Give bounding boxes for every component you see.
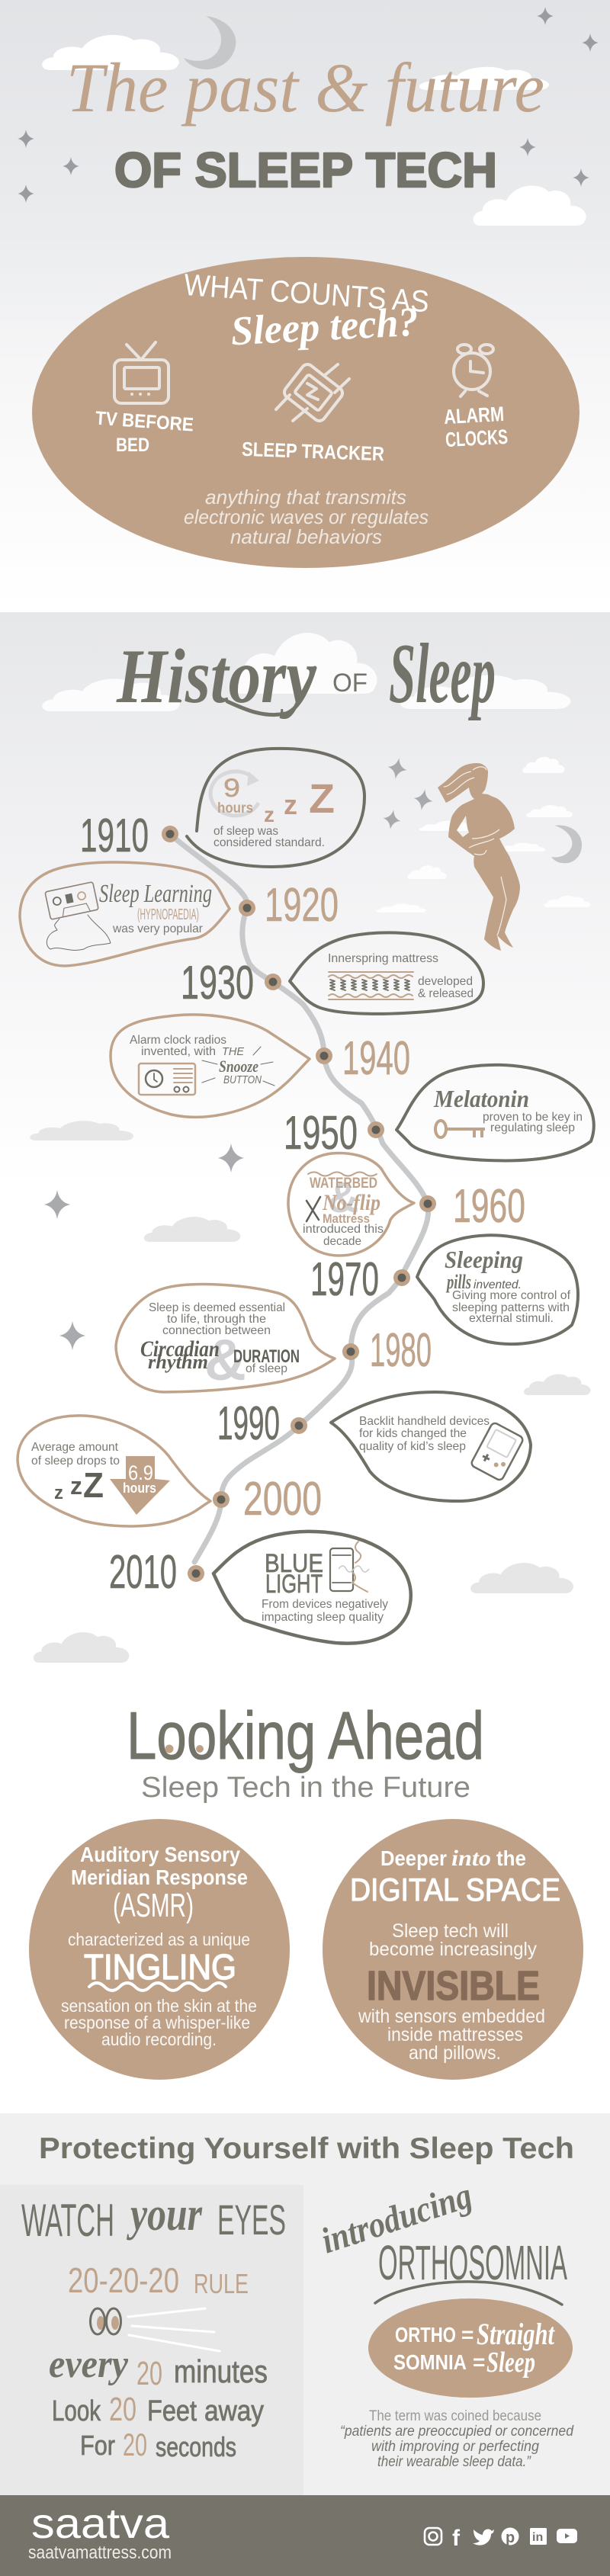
callout 1910: considered standard. [214,836,325,849]
nine hours: hours [217,800,253,816]
icon: moon [184,16,236,69]
callout 1980: Sleep is deemed essential [149,1301,285,1314]
panel: what counts as sleep tech [32,257,580,568]
callout 1970: external stimuli. [469,1312,554,1325]
callout 2010 [214,1532,411,1644]
callout 1930: & released [418,987,474,1000]
label: alarm clocks [443,403,509,451]
heading: Sleep tech? [230,299,419,354]
callout 1950 [396,1065,594,1160]
zzz: z [70,1472,82,1500]
oval: definitions [368,2299,573,2398]
callout 1950: regulating sleep [490,1121,575,1134]
icon: sleeping woman [438,763,520,951]
history clouds [42,633,590,913]
panel: ASMR: sensation on the skin at the [61,1996,257,2016]
icon: youtube [557,2529,577,2543]
social icons [425,2526,577,2551]
callout 2010: BLUE [265,1549,323,1578]
callout 1980: connection between [162,1324,271,1337]
callout 2000 [18,1416,210,1526]
zzz: Z [309,776,335,822]
panel: watch your eyes: your [126,2189,203,2241]
callout 1910 [187,749,364,867]
panel: watch your eyes: 20 [109,2391,136,2428]
zzz: z [264,803,274,826]
callout 1950: proven to be key in [483,1111,583,1124]
panel: digital space: INVISIBLE [367,1963,540,2009]
year labels: 1990 [217,1397,280,1450]
background: protecting section [0,2113,610,2495]
icon: pinterest [502,2528,518,2546]
panel: watch your eyes: seconds [156,2431,236,2462]
panel: ASMR: Auditory Sensory [80,1843,240,1866]
oval: definitions: ORTHO [395,2323,456,2347]
timeline nodes [162,826,436,1582]
callout 2010: impacting sleep quality [262,1611,384,1624]
year labels: 1960 [453,1180,525,1233]
callout 1960 [288,1153,414,1256]
panel: ASMR: characterized as a unique [68,1930,250,1949]
gray clouds [30,1121,590,1663]
panel: digital space: the [496,1846,526,1870]
callout 1930: Innerspring mattress [328,952,438,965]
background: history section [0,612,610,1189]
year labels: 1950 [284,1107,358,1160]
heading: looking ahead: Looking Ahead [127,1698,484,1773]
callout 1930: developed [418,975,473,988]
callout 1980: of sleep [246,1362,287,1375]
year labels: 1930 [181,957,254,1009]
callout 1990: quality of kid’s sleep [359,1440,466,1453]
panel: ASMR: Meridian Response [71,1865,248,1889]
icon: tv [114,342,169,403]
year labels: 1980 [370,1324,432,1377]
year labels: 2000 [243,1473,322,1525]
callout 1940 [111,1015,310,1117]
heading [183,268,430,354]
icon: cassette [45,882,98,919]
callout 1930 [290,932,483,1014]
panel: watch your eyes: For [80,2430,115,2461]
callout 2010: From devices negatively [262,1598,388,1611]
panel: watch your eyes: every [49,2343,129,2386]
panel: orthosomnia [316,2175,574,2470]
title [66,49,544,197]
callout 1970: Giving more control of [452,1289,571,1302]
callout 2000: Average amount [31,1441,119,1454]
label: tv before bed [95,408,194,456]
oval: definitions: Straight [477,2317,555,2351]
panel: digital space: become increasingly [369,1939,537,1960]
oval: definitions: = [461,2323,474,2347]
timeline line [170,834,429,1562]
panel: ASMR: TINGLING [84,1947,236,1987]
year labels: 2010 [109,1546,177,1599]
icon: alarm clock [454,345,493,396]
heading: history of sleep [116,627,496,721]
icon: sleep tracker [276,362,349,423]
definition text: natural behaviors [230,525,382,548]
heading: looking ahead: Sleep Tech in the Future [141,1772,470,1804]
heading: looking ahead [127,1698,484,1804]
panel: watch your eyes [0,2185,303,2495]
zzz [54,1465,104,1505]
callout 2010: LIGHT [265,1570,323,1599]
label: alarm clocks: CLOCKS [445,425,509,451]
callout 1980: & [204,1328,246,1393]
panel: orthosomnia: “patients are preoccupied or concerned [340,2424,574,2440]
icon: down arrow: 6.9 [128,1461,153,1484]
callout 1970 [417,1235,578,1344]
footer [0,2495,610,2576]
label: tv before bed: TV BEFORE [95,408,194,435]
icon: pinterest: p [506,2529,515,2546]
callout 1920 [20,862,230,966]
icon: mattress [329,972,413,999]
callout 1950: Melatonin [433,1085,529,1112]
icon: down arrow: hours [123,1480,156,1496]
icon: cross [307,1197,320,1221]
panel: watch your eyes: RULE [194,2268,249,2299]
year labels [80,810,525,1599]
label: sleep tracker: SLEEP TRACKER [241,438,385,465]
heading: history of sleep: Sleep [389,627,496,721]
icon: eyes [90,2308,220,2351]
figure stars [381,756,435,831]
panel: watch your eyes: Feet [147,2395,197,2427]
nine hours: 9 [223,774,240,803]
callout 1970: invented. [474,1278,522,1291]
definition text: anything that transmits [205,486,406,508]
title: OF SLEEP TECH [114,143,497,197]
panel: ASMR: response of a whisper-like [64,2013,250,2032]
icon: facebook: f [452,2526,461,2551]
callout 1970: pills [446,1271,471,1293]
callout 1920: Sleep Learning [99,880,212,908]
callout 2000: of sleep drops to [31,1455,120,1468]
callout 1990 [331,1392,531,1501]
oval: definitions: SOMNIA [393,2350,467,2374]
icon: twitter [473,2529,494,2546]
panel: orthosomnia: introducing [316,2175,477,2261]
logo: saatva [31,2499,170,2547]
icon: down arrow [110,1456,170,1515]
nine hours [217,774,253,816]
year labels: 1910 [80,810,149,862]
year labels: 1920 [265,879,339,932]
callout 1920: (HYPNOPAEDIA) [137,906,199,923]
callout 1960: No-flip [322,1190,380,1215]
panel: ASMR: (ASMR) [113,1887,194,1924]
definition text [184,486,429,548]
icon: linkedin: in [532,2531,543,2544]
panel: watch your eyes: EYES [217,2196,286,2244]
panel: orthosomnia: The term was coined because [369,2408,541,2424]
callout 1980: Circadian [140,1336,220,1362]
callout 1920: was very popular [112,922,204,935]
year labels: 1940 [342,1032,410,1085]
heading: history of sleep: History [116,634,316,720]
label: tv before bed: BED [116,435,149,456]
panel: watch your eyes: away [204,2395,264,2427]
icon: linkedin [530,2528,547,2545]
callout 1940: Alarm clock radios [130,1034,226,1047]
icon: handheld console [470,1422,524,1481]
callout 1940: invented, with [141,1045,216,1058]
panel: digital space: into [451,1846,491,1871]
icon: circular arrow [210,772,259,816]
title: The past & future [66,49,544,127]
panel: watch your eyes: 20 [136,2355,162,2392]
callout 1960: & [328,1173,358,1221]
panel: digital space: Sleep tech will [392,1920,509,1942]
panel: digital space: with sensors embedded [358,2006,545,2027]
icon: instagram [425,2528,441,2545]
url: saatvamattress.com [28,2542,172,2563]
heading: history of sleep: OF [332,669,368,698]
callout 1990: Backlit handheld devices [359,1415,490,1428]
callout 1980: to life, through the [167,1313,266,1326]
callout 1970: Sleeping [445,1246,523,1273]
callout 1960: introduced this [303,1223,384,1236]
definition text: electronic waves or regulates [184,505,429,528]
panel: digital space: Deeper [380,1846,447,1870]
icon: small moon [551,825,582,863]
oval: definitions: Sleep [486,2347,535,2379]
year labels: 1970 [310,1253,379,1306]
callout 1970: sleeping patterns with [452,1301,570,1314]
header clouds [42,35,586,226]
panel: watch your eyes: 20 [123,2427,147,2462]
arc [375,2282,562,2305]
callout 1960: WATERBED [310,1176,377,1192]
gray stars [44,1144,244,1350]
panel: watch your eyes: 20-20-20 [68,2260,179,2300]
callout 1980: DURATION [233,1346,300,1367]
oval: definitions: = [473,2350,485,2374]
callout 1990: for kids changed the [359,1427,467,1440]
icon: key [435,1121,485,1137]
callout 1960: decade [323,1235,361,1248]
heading: WHAT COUNTS AS [183,268,430,319]
panel: digital space [323,1819,583,2080]
callout 1940: THE [222,1045,245,1058]
panel: digital space: and pillows. [409,2042,501,2064]
panel: watch your eyes: WATCH [21,2195,114,2246]
zzz: Z [83,1465,104,1505]
panel: digital space: DIGITAL SPACE [350,1872,560,1907]
panel: orthosomnia: their wearable sleep data.” [377,2454,531,2470]
icon: phone [330,1541,369,1592]
callout 1940: Snooze [219,1057,258,1076]
header stars [18,7,599,203]
icon: radio [139,1063,195,1095]
background: header [0,0,610,610]
zzz [264,776,335,826]
callout 1910: of sleep was [214,825,278,838]
panel: watch your eyes: Look [52,2395,101,2427]
heading: protecting yourself: Protecting Yourself with Sleep Tech [39,2132,574,2165]
label: alarm clocks: ALARM [443,403,505,428]
callout 1980: rhythm [148,1351,208,1373]
callout 1940: BUTTON [223,1073,262,1086]
zzz: z [54,1483,63,1503]
panel: digital space: inside mattresses [387,2024,523,2045]
panel: orthosomnia: with improving or perfecting [371,2439,539,2455]
panel: ASMR [29,1819,290,2080]
panel: ASMR: audio recording. [101,2029,217,2049]
panel: watch your eyes: minutes [174,2353,268,2389]
callout 1960: Mattress [323,1211,370,1226]
callout 1980 [116,1285,335,1393]
zzz: z [284,789,297,820]
